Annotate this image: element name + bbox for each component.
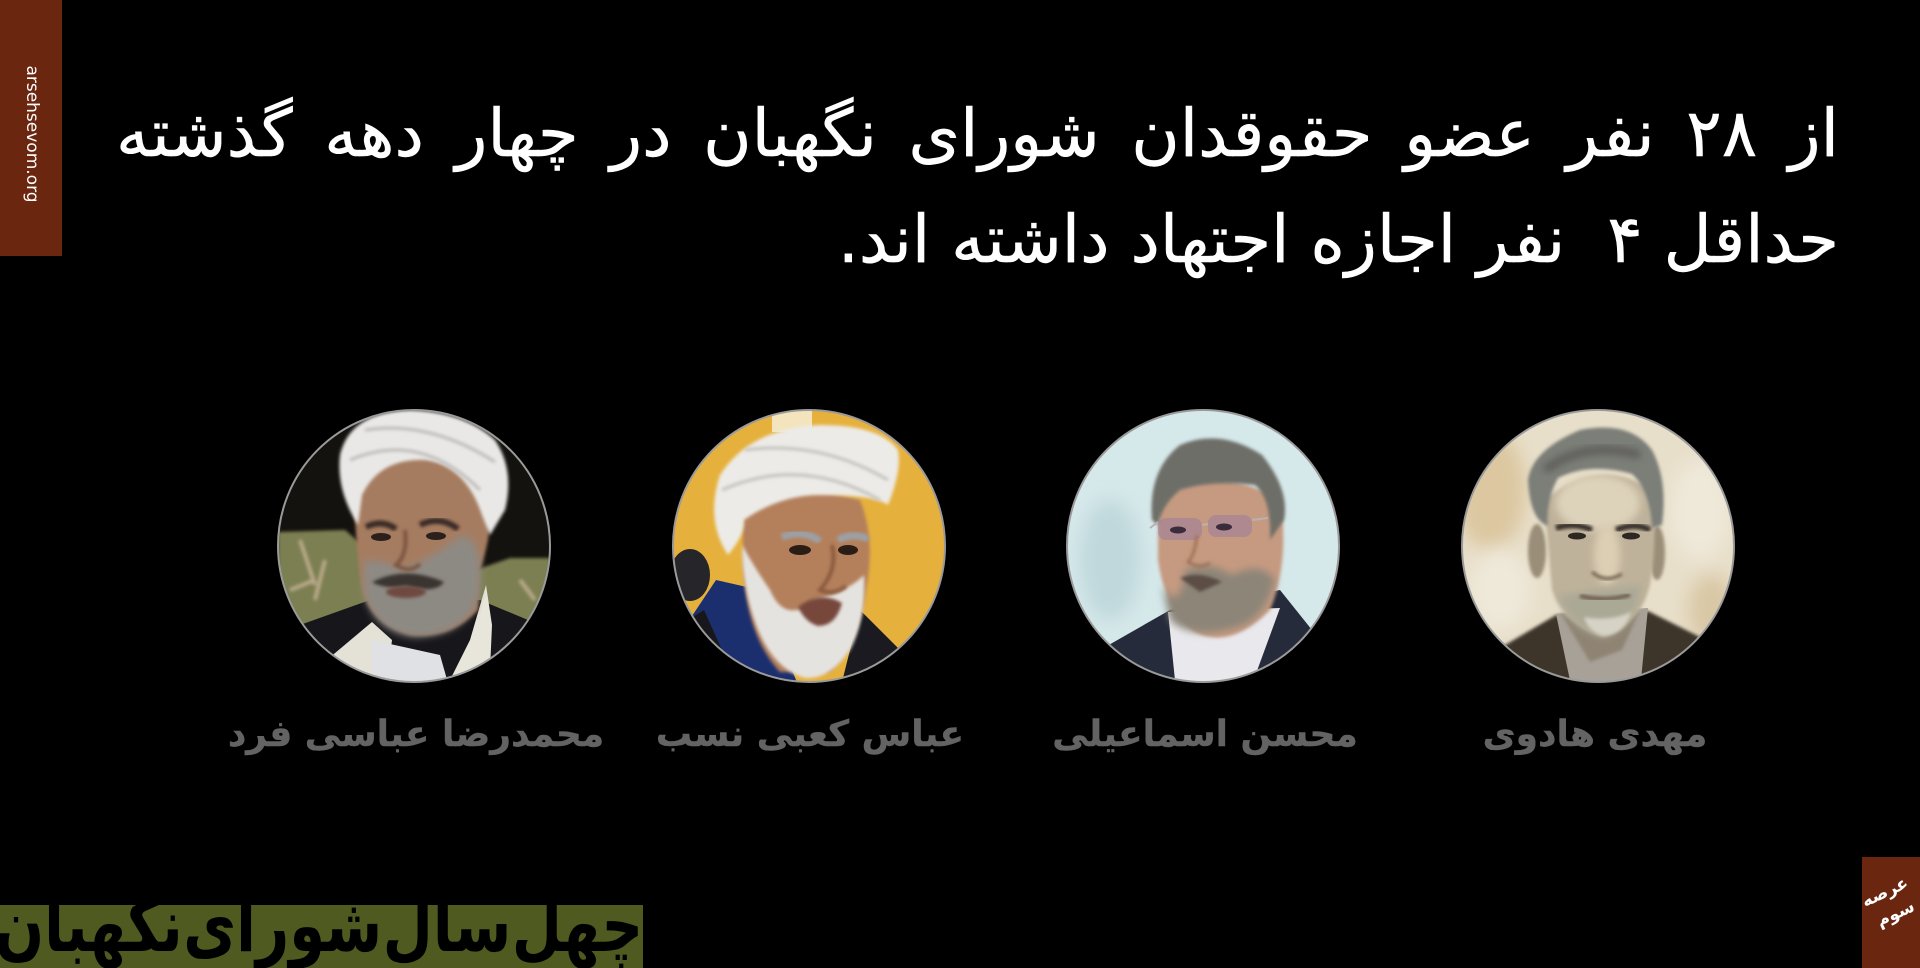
name: Mohsen Esmaili: محسن اسماعیلی	[1052, 714, 1358, 755]
portrait: Mohsen Esmaili	[1066, 410, 1340, 690]
name: Abbas Kaabi Nasab: عباس کعبی نسب	[656, 714, 964, 755]
logo calligraphy: سوم	[1873, 896, 1918, 931]
title line 2: حداقل ۴ نفر اجازه اجتهاد داشته اند.	[838, 201, 1839, 278]
footer band title	[0, 905, 643, 968]
logo box	[1862, 857, 1920, 968]
portrait: Mohammadreza Abbasi Fard	[270, 410, 560, 690]
portrait: Abbas Kaabi Nasab	[670, 408, 946, 690]
portraits	[277, 409, 1735, 683]
portrait: Mehdi Hadavi	[1454, 410, 1736, 690]
name: Mehdi Hadavi: مهدی هادوی	[1483, 714, 1707, 755]
title line 1: از ۲۸ نفر عضو حقوقدان شورای نگهبان در چهار دهه گذشته	[116, 95, 1839, 172]
website text: arsehsevom.org	[22, 65, 42, 203]
side tab: website	[0, 0, 62, 256]
name: Mohammadreza Abbasi Fard: محمدرضا عباسی فرد	[228, 714, 604, 755]
title	[116, 95, 1839, 278]
logo calligraphy	[1862, 873, 1918, 931]
